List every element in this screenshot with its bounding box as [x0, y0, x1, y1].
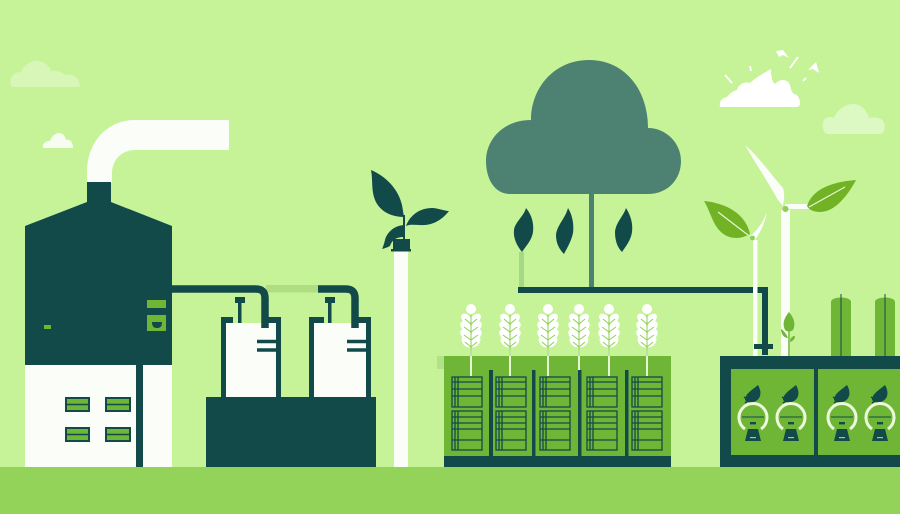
pipe from silo to tanks — [172, 289, 265, 328]
building lower white base — [25, 365, 172, 467]
pipe crossbar — [754, 344, 773, 349]
tank one — [221, 297, 281, 397]
leaf blade — [807, 180, 856, 212]
white stack — [394, 250, 408, 467]
control panel — [720, 356, 900, 467]
leaf blade — [704, 201, 750, 238]
wheat row — [458, 304, 660, 376]
cloud: faint top right — [823, 104, 885, 134]
sprout on stack — [371, 170, 449, 252]
gauges — [739, 385, 894, 441]
cloud: white with sparks — [720, 50, 819, 107]
building upper dark silo — [25, 182, 172, 365]
white exhaust pipe — [87, 120, 229, 183]
building windows — [66, 398, 130, 441]
cloud: faint top left — [10, 61, 80, 87]
large wind turbine — [745, 145, 856, 356]
small wind turbine — [704, 201, 767, 356]
building dark strip — [136, 365, 143, 467]
silo indicator panels — [44, 300, 166, 331]
building — [25, 182, 172, 467]
tank two — [309, 297, 371, 397]
digester base — [206, 397, 376, 467]
seedling — [781, 312, 795, 356]
horizontal distribution pipe — [518, 290, 765, 355]
cloud stem — [589, 194, 594, 287]
field base — [444, 456, 671, 467]
shelf racks — [452, 377, 662, 450]
pipe into second tank — [318, 289, 355, 328]
faded pipe section — [266, 285, 318, 292]
green cylinders — [831, 294, 895, 356]
large cloud — [486, 60, 681, 194]
rack dividers — [489, 370, 628, 460]
ground — [0, 467, 900, 514]
field block — [437, 304, 671, 467]
cloud: small white left — [43, 133, 73, 148]
falling leaves — [514, 208, 632, 254]
faint stem under leaf — [519, 252, 524, 287]
